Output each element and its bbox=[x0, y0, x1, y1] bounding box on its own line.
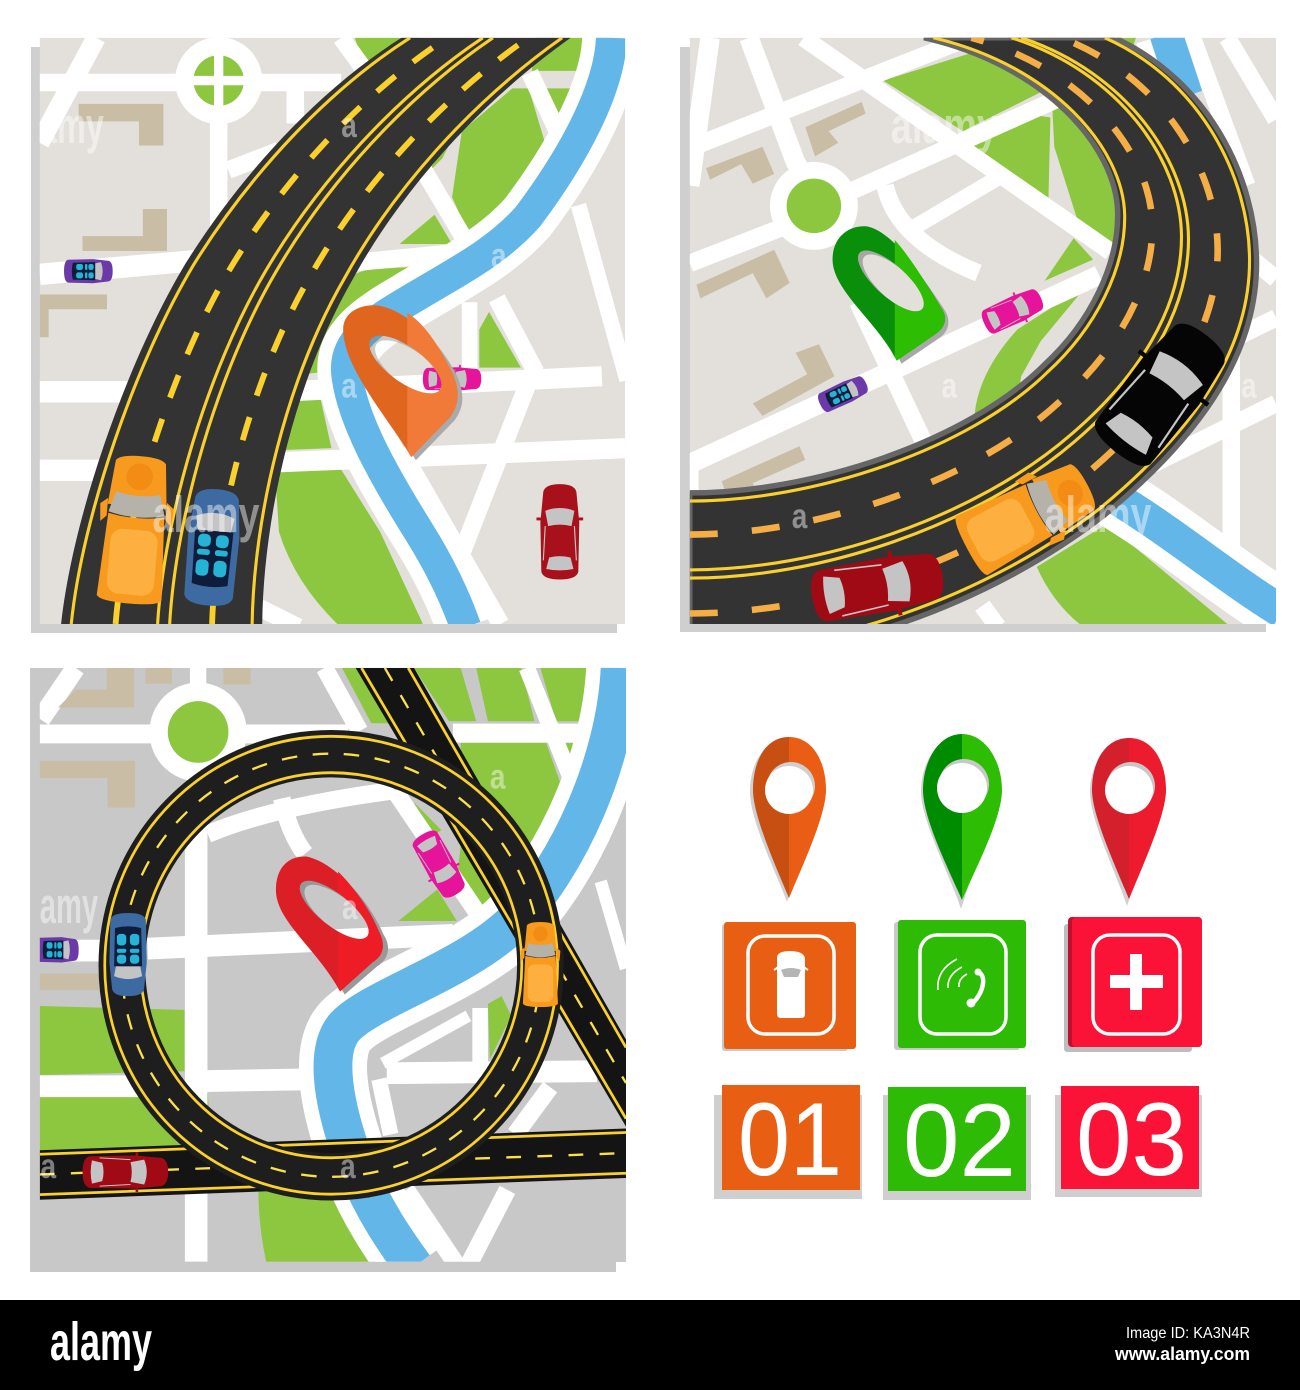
number card 01: 01 bbox=[738, 1082, 842, 1198]
map streets bbox=[40, 668, 626, 1265]
map greens bbox=[275, 38, 582, 624]
watermarks bbox=[40, 757, 506, 1186]
watermarks: a bbox=[491, 236, 507, 275]
pin: orange legend bbox=[750, 737, 826, 902]
buildings bbox=[40, 668, 251, 990]
cars bbox=[64, 259, 583, 608]
watermarks: a bbox=[1241, 367, 1257, 406]
watermarks: amy bbox=[40, 877, 99, 934]
watermarks: a bbox=[41, 1147, 56, 1186]
roundabout bbox=[770, 162, 858, 250]
panel: ring interchange map bbox=[30, 668, 626, 1272]
pin: red legend bbox=[1090, 738, 1166, 906]
buildings bbox=[40, 104, 167, 337]
icon: cross bbox=[1110, 954, 1163, 1010]
watermarks: a bbox=[341, 367, 357, 406]
map greens bbox=[40, 668, 607, 1262]
buildings bbox=[696, 102, 866, 493]
watermarks: alamy bbox=[891, 97, 998, 154]
map streets bbox=[690, 38, 1276, 627]
highway bbox=[690, 38, 1257, 660]
river bbox=[333, 668, 620, 1267]
watermarks bbox=[792, 97, 1257, 543]
diagonal road bbox=[356, 668, 626, 1127]
panel: curved highway map bbox=[30, 37, 627, 633]
icon: phone bbox=[938, 959, 983, 1008]
pin: red on map bbox=[276, 856, 388, 995]
panel: loop highway map bbox=[680, 34, 1282, 660]
cars bbox=[36, 825, 560, 1192]
watermarks: alamy bbox=[153, 486, 260, 543]
card: phone icon bbox=[894, 920, 1026, 1050]
highway bbox=[61, 38, 571, 624]
footer bar bbox=[0, 1300, 1300, 1390]
number card 02: 02 bbox=[903, 1083, 1016, 1199]
ring road bbox=[105, 736, 558, 1194]
image id: Image ID: KA3N4R bbox=[1126, 1325, 1250, 1342]
river bbox=[346, 38, 612, 627]
river bbox=[1111, 34, 1282, 612]
pin: green on map bbox=[833, 226, 948, 364]
site url: www.alamy.com bbox=[1114, 1344, 1250, 1364]
pin: orange on map bbox=[343, 305, 462, 460]
icon: van bbox=[774, 951, 808, 1018]
number card 03: 03 bbox=[1076, 1082, 1187, 1198]
watermarks: a bbox=[941, 367, 957, 406]
watermarks: alamy bbox=[1045, 486, 1152, 543]
horizontal road bbox=[40, 1129, 626, 1200]
map greens bbox=[883, 38, 1227, 624]
watermarks: a bbox=[341, 106, 357, 145]
watermarks: a bbox=[340, 1147, 356, 1186]
map streets bbox=[40, 38, 627, 627]
card: medical cross bbox=[1064, 917, 1202, 1052]
watermarks: lamy bbox=[30, 97, 104, 154]
cars bbox=[806, 283, 1241, 630]
watermarks: a bbox=[792, 497, 808, 536]
watermarks: a bbox=[342, 888, 358, 927]
card: car icon bbox=[722, 922, 856, 1051]
watermarks bbox=[30, 97, 507, 543]
roundabout bbox=[175, 37, 262, 124]
pin: green legend bbox=[921, 734, 1002, 909]
logo: alamy bbox=[50, 1312, 152, 1372]
watermarks: a bbox=[490, 757, 506, 797]
roundabout bbox=[149, 683, 247, 781]
